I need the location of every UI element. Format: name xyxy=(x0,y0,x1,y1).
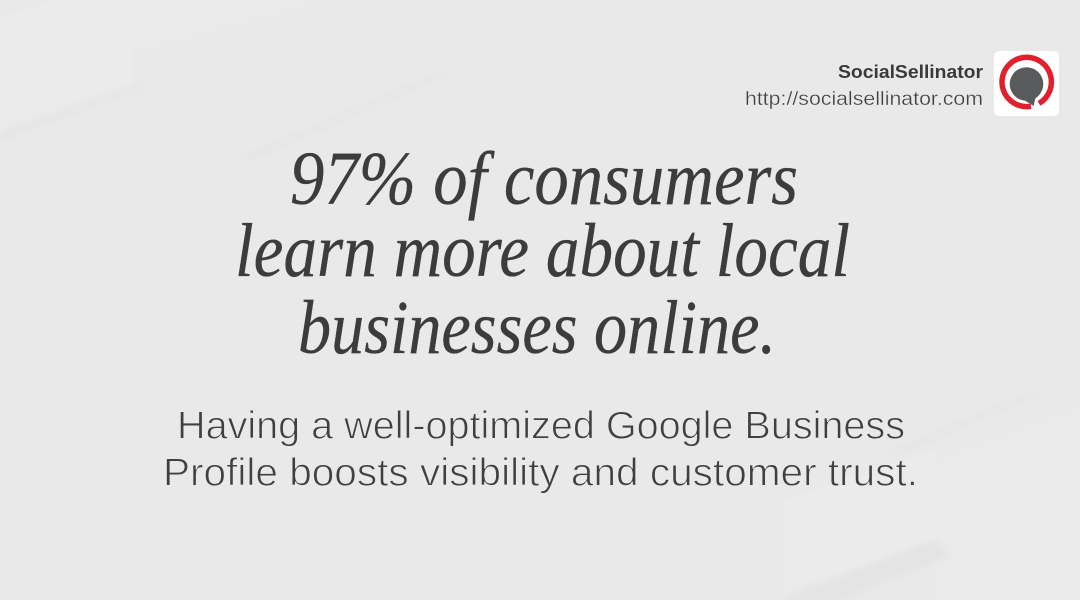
supporting line 2: Profile boosts visibility and customer trust. xyxy=(163,452,918,494)
supporting line 1: Having a well-optimized Google Business xyxy=(177,404,905,448)
icon: SocialSellinator logo xyxy=(994,51,1059,116)
headline line 1: 97% of consumers xyxy=(290,137,798,221)
supporting text xyxy=(163,404,918,494)
brand url: http://socialsellinator.com xyxy=(745,89,983,110)
headline line 3: businesses online. xyxy=(298,286,776,370)
headline xyxy=(235,137,850,370)
headline line 2: learn more about local xyxy=(235,209,850,293)
brand name: SocialSellinator xyxy=(838,62,983,82)
